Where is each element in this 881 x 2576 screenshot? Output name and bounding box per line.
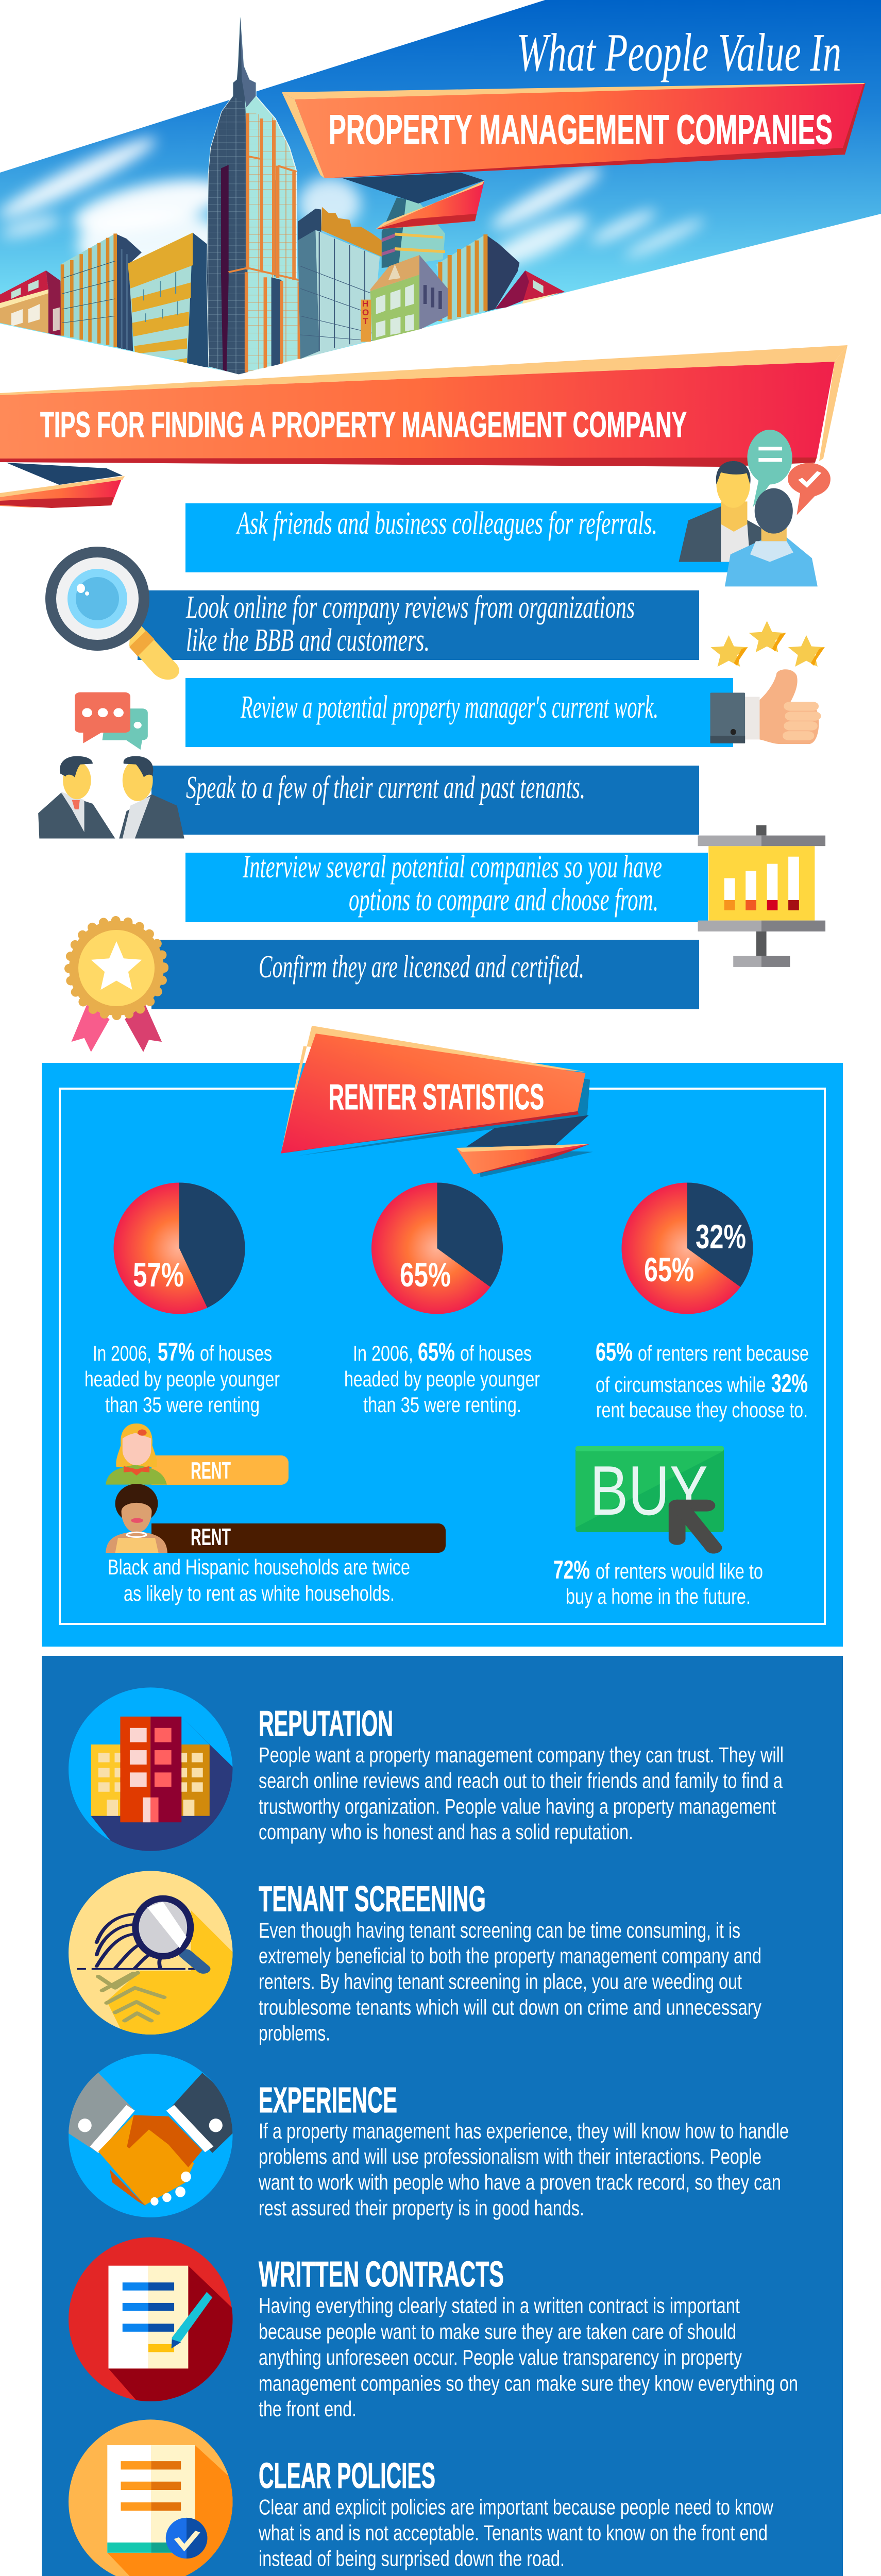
rent bar: dark: [106, 1484, 446, 1553]
building: main skyscraper: [207, 17, 302, 375]
caption: circumstances vs choice: 65%: [596, 1337, 633, 1366]
tip 2 bar: Look online for company reviews from organizations: [185, 590, 635, 625]
icon: thumbs up: [710, 669, 821, 744]
text: tenant screening: problems.: [259, 2021, 330, 2045]
hero sky background: [0, 0, 881, 376]
banner: tips heading: [0, 345, 848, 508]
tip 6 bar: Confirm they are licensed and certified.: [259, 950, 584, 985]
icon: two people with speech bubbles: [679, 430, 831, 586]
rent bar: light: [106, 1423, 289, 1485]
tip 3 bar: [185, 678, 733, 747]
icon: buy button with cursor: BUY: [590, 1451, 708, 1530]
heading: tenant screening: TENANT SCREENING: [259, 1878, 486, 1919]
hotel sign text: T: [363, 316, 368, 326]
pie chart: 57%: [113, 1183, 245, 1314]
pie chart: 65% and 32%: 65%: [644, 1250, 694, 1289]
text: clear policies: [258, 2495, 774, 2570]
building: yellow bands: [128, 233, 209, 367]
caption: 57% of houses: In 2006,: [93, 1341, 151, 1365]
caption: circumstances vs choice: [596, 1337, 809, 1422]
caption: black and hispanic households: [108, 1555, 410, 1605]
icon: rating stars: [710, 621, 825, 667]
caption: 65% of houses: headed by people younger: [344, 1367, 540, 1391]
caption: 57% of houses: 57%: [158, 1337, 195, 1366]
caption: black and hispanic households: as likely to rent as white households.: [124, 1581, 395, 1605]
banner: property management companies: [282, 83, 866, 229]
heading: written contracts: WRITTEN CONTRACTS: [259, 2254, 504, 2294]
icon: curly-haired woman: [106, 1484, 167, 1553]
panel: renter statistics: [42, 1026, 843, 1647]
tip 4 bar: [151, 766, 699, 835]
caption: circumstances vs choice: of renters rent because: [638, 1341, 809, 1365]
rent bar: light: RENT: [191, 1457, 231, 1484]
caption: 57% of houses: than 35 were renting: [105, 1393, 260, 1417]
text: tenant screening: Even though having tenant screening can be time consuming, it is: [259, 1918, 740, 1942]
tip 1 bar: [185, 503, 731, 572]
building: red right corner: [495, 270, 565, 309]
caption: 65% of houses: [344, 1337, 540, 1417]
caption: 65% of houses: of houses: [460, 1341, 532, 1365]
text: written contracts: the front end.: [259, 2397, 357, 2421]
pie chart: 65%: [371, 1183, 503, 1314]
pie chart: 57%: 57%: [133, 1256, 184, 1294]
caption: 72% of renters: [553, 1555, 763, 1608]
banner: renter statistics heading: RENTER STATISTICS: [329, 1077, 544, 1117]
pie chart: 65% and 32%: 32%: [696, 1217, 746, 1256]
text: written contracts: because people want to make sure they are taken care of should: [259, 2319, 736, 2344]
tip 5 bar: options to compare and choose from.: [349, 883, 658, 918]
icon: policy document with check: [69, 2419, 233, 2576]
icon: handshake: [69, 2054, 233, 2217]
text: tenant screening: [259, 1918, 761, 2045]
building: orange grid right: [436, 234, 519, 322]
icon: written contract: [69, 2237, 233, 2405]
heading: experience: EXPERIENCE: [259, 2080, 397, 2120]
icon: fingerprint under magnifier: [69, 1871, 233, 2035]
illustration: city buildings: [0, 17, 565, 375]
caption: 57% of houses: [84, 1337, 280, 1417]
caption: 65% of houses: 65%: [418, 1337, 455, 1366]
caption: 72% of renters: of renters would like to: [596, 1559, 763, 1583]
tip 5 bar: [185, 850, 708, 922]
panel: what people value: [42, 1656, 843, 2576]
building: red left corner: [0, 270, 62, 336]
text: reputation: [259, 1743, 784, 1844]
tip 5 bar: Interview several potential companies so you have: [242, 850, 662, 885]
caption: 72% of renters: buy a home in the future.: [566, 1584, 751, 1608]
text: experience: rest assured their property is in good hands.: [259, 2196, 584, 2220]
building: glass block with battlements: [298, 207, 382, 359]
tip 2 bar: [138, 590, 699, 660]
pie chart: 65% and 32%: [621, 1183, 753, 1314]
building: glass with orange fins: [60, 233, 142, 351]
caption: circumstances vs choice: rent because they choose to.: [596, 1398, 808, 1422]
caption: circumstances vs choice: of circumstances while: [596, 1372, 766, 1397]
icon: chat bubbles: [75, 692, 148, 750]
caption: 57% of houses: headed by people younger: [84, 1367, 280, 1391]
pie chart: 65%: 65%: [400, 1256, 451, 1294]
icon: award medal: [69, 921, 164, 1052]
tip 4 bar: Speak to a few of their current and past tenants.: [186, 770, 585, 805]
text: written contracts: [259, 2294, 798, 2421]
caption: circumstances vs choice: 32%: [771, 1369, 808, 1398]
hotel sign text: H: [362, 299, 368, 309]
text: written contracts: Having everything clearly stated in a written contract is important: [259, 2294, 740, 2318]
caption: 65% of houses: than 35 were renting.: [363, 1393, 521, 1417]
icon: magnifying glass: [45, 547, 179, 680]
building: hotel: [361, 255, 448, 342]
text: tenant screening: renters. By having tenant screening in place, you are weeding out: [259, 1970, 742, 1994]
icon: two businessmen: [38, 756, 184, 839]
caption: 65% of houses: In 2006,: [353, 1341, 413, 1365]
building: teal tower behind banner: [382, 197, 445, 268]
icon: blonde woman: [106, 1423, 167, 1485]
text: experience: [258, 2119, 789, 2220]
heading: reputation: REPUTATION: [259, 1703, 393, 1743]
caption: black and hispanic households: Black and Hispanic households are twice: [108, 1555, 410, 1579]
rent bar: dark: RENT: [191, 1523, 231, 1550]
text: clear policies: instead of being surprised down the road.: [259, 2546, 565, 2570]
tip 2 bar: like the BBB and customers.: [186, 623, 430, 658]
banner: renter statistics heading: [281, 1026, 593, 1177]
caption: 72% of renters: 72%: [553, 1555, 590, 1584]
text: reputation: company who is honest and has a solid reputation.: [259, 1820, 633, 1844]
tip 1 bar: Ask friends and business colleagues for referrals.: [235, 506, 657, 541]
text: written contracts: anything unforeseen occur. People value transparency in property: [259, 2345, 742, 2369]
icon: buy button with cursor: [575, 1446, 724, 1548]
hotel sign text: O: [362, 308, 369, 317]
tip 6 bar: [151, 940, 699, 1009]
caption: 57% of houses: of houses: [200, 1341, 272, 1365]
icon: presentation board chart: [698, 825, 825, 967]
icon: office building: [69, 1687, 233, 1854]
heading: clear policies: CLEAR POLICIES: [259, 2455, 435, 2496]
